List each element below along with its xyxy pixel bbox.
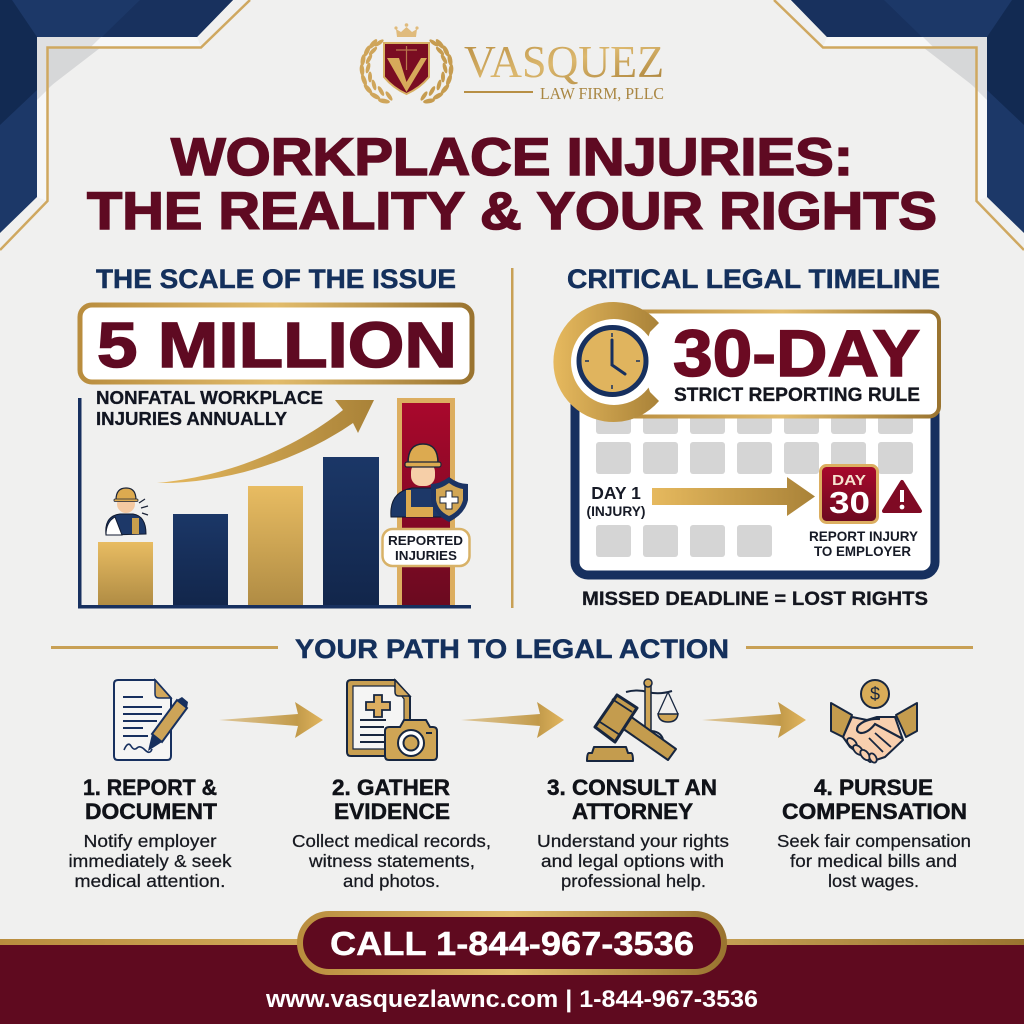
icon: gavel and scales xyxy=(587,679,678,761)
heading: the scale of the issue: THE SCALE OF THE ISSUE xyxy=(96,264,456,294)
icon: clock xyxy=(553,302,659,422)
icon: document and pencil xyxy=(114,680,188,760)
bar chart xyxy=(78,398,471,608)
step description: and photos. xyxy=(343,871,440,891)
step description: and legal options with xyxy=(541,851,724,871)
icon: handshake and coin xyxy=(831,680,917,764)
step description: immediately & seek xyxy=(68,851,232,871)
top-left corner ornament xyxy=(0,0,250,250)
panel: critical legal timeline xyxy=(553,302,939,610)
calendar cells xyxy=(596,410,913,557)
step description xyxy=(68,831,232,891)
step description: witness statements, xyxy=(308,851,475,871)
label: report injury to employer: TO EMPLOYER xyxy=(814,543,911,559)
label: report injury to employer xyxy=(809,528,919,559)
stat caption xyxy=(96,387,323,429)
label: reported injuries: INJURIES xyxy=(395,548,457,563)
step description xyxy=(292,831,491,891)
icon: handshake and coin: $ xyxy=(870,684,880,704)
shield scales emblem xyxy=(396,46,417,70)
logo: Vasquez Law Firm xyxy=(359,23,664,104)
call to action button xyxy=(300,914,724,972)
step title: 2. GATHER xyxy=(332,775,450,800)
heading: critical legal timeline: CRITICAL LEGAL TIMELINE xyxy=(567,264,940,294)
step title: DOCUMENT xyxy=(85,799,218,824)
step description: for medical bills and xyxy=(790,851,957,871)
step title: 1. REPORT & xyxy=(83,775,217,800)
arrow: step 3 to 4 xyxy=(702,702,806,738)
heading: your path to legal action xyxy=(51,634,973,664)
bar 1 xyxy=(98,542,153,605)
icon: shield xyxy=(384,43,429,94)
step title xyxy=(83,775,218,824)
icon: warning xyxy=(884,482,920,511)
stat caption: NONFATAL WORKPLACE xyxy=(96,387,323,408)
wordmark: VASQUEZ xyxy=(464,37,664,87)
badge: day 30: DAY xyxy=(832,472,866,489)
step 2: gather evidence xyxy=(292,680,491,891)
arrow: rising trend xyxy=(157,400,374,483)
calendar xyxy=(575,390,935,575)
step description: medical attention. xyxy=(74,871,226,891)
icon: laurel wreath, right xyxy=(419,38,454,104)
bar 5: reported injuries xyxy=(397,398,455,605)
arrow: day 1 to day 30 xyxy=(652,477,815,516)
step title xyxy=(547,775,717,824)
badge: day 30 xyxy=(820,466,878,522)
step description: Notify employer xyxy=(84,831,217,851)
stat: 30-day: 30-DAY xyxy=(673,316,920,390)
title xyxy=(87,128,937,241)
panel: the scale of the issue xyxy=(78,305,472,608)
shield monogram xyxy=(387,58,427,92)
heading: your path to legal action: YOUR PATH TO LEGAL ACTION xyxy=(295,634,729,664)
step title: 4. PURSUE xyxy=(814,775,933,800)
icon: injured worker xyxy=(106,488,148,535)
step title: 3. CONSULT AN xyxy=(547,775,717,800)
step title: ATTORNEY xyxy=(572,799,693,824)
footer contact line: www.vasquezlawnc.com | 1-844-967-3536 xyxy=(265,986,758,1013)
footer band xyxy=(0,939,1024,1024)
warning line: MISSED DEADLINE = LOST RIGHTS xyxy=(582,588,928,610)
step description xyxy=(537,831,729,891)
bar 4 xyxy=(323,457,379,605)
banner: 30-day rule xyxy=(553,302,939,422)
step description: Understand your rights xyxy=(537,831,729,851)
top-right corner ornament xyxy=(774,0,1024,250)
stat caption: INJURIES ANNUALLY xyxy=(96,408,288,429)
bar 3 xyxy=(248,486,303,605)
label: day 1: DAY 1 xyxy=(591,483,641,503)
step 1: report and document xyxy=(68,680,232,891)
arrow: step 1 to 2 xyxy=(219,702,323,738)
label: day 1: (INJURY) xyxy=(586,504,646,519)
stat callout: 5 million: 5 MILLION xyxy=(97,309,457,381)
bar 2 xyxy=(173,514,228,605)
step description: Seek fair compensation xyxy=(777,831,971,851)
arrow: step 2 to 3 xyxy=(461,702,564,738)
step description: professional help. xyxy=(561,871,706,891)
label: day 1 xyxy=(586,483,646,519)
stat caption: STRICT REPORTING RULE xyxy=(674,385,920,406)
label: reported injuries: REPORTED xyxy=(388,533,463,548)
title: WORKPLACE INJURIES: xyxy=(171,128,853,187)
label: report injury to employer: REPORT INJURY xyxy=(809,528,919,544)
wordmark rule xyxy=(464,91,533,93)
step title xyxy=(332,775,450,824)
step description: Collect medical records, xyxy=(292,831,491,851)
call to action button: CALL 1-844-967-3536 xyxy=(330,925,694,962)
step 4: pursue compensation xyxy=(777,680,971,891)
icon: medical record and camera xyxy=(347,680,437,760)
step title: COMPENSATION xyxy=(782,799,967,824)
badge: day 30: 30 xyxy=(829,485,870,520)
step title xyxy=(782,775,967,824)
icon: laurel wreath, left xyxy=(359,38,394,104)
step 3: consult an attorney xyxy=(537,679,729,891)
firm type: LAW FIRM, PLLC xyxy=(540,84,664,103)
label: reported injuries xyxy=(382,529,470,566)
icon: crown xyxy=(394,23,419,37)
step description: lost wages. xyxy=(828,871,919,891)
step description xyxy=(777,831,971,891)
title: THE REALITY & YOUR RIGHTS xyxy=(87,182,937,241)
step title: EVIDENCE xyxy=(334,799,450,824)
icon: worker with shield xyxy=(391,444,468,522)
